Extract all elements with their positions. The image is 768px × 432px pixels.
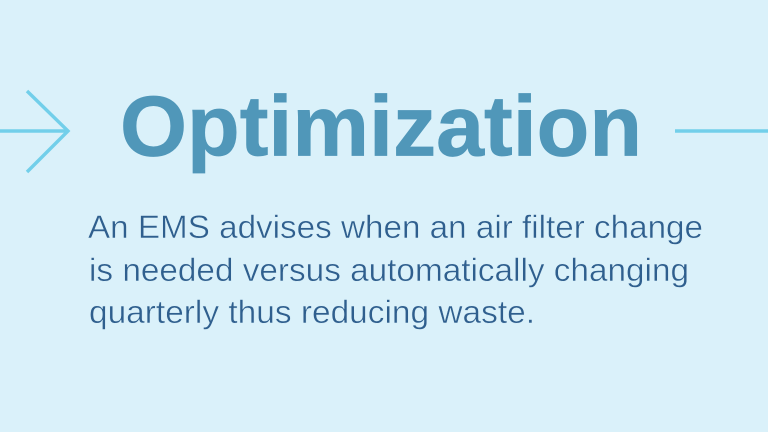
- arrow: right connector line: [675, 129, 768, 133]
- body line 3: quarterly thus reducing waste.: [89, 294, 535, 330]
- title: Optimization: [120, 80, 642, 174]
- body line 1: An EMS advises when an air filter change: [88, 209, 703, 245]
- body text: [88, 209, 703, 330]
- icon: left arrow: [0, 91, 68, 172]
- body line 2: is needed versus automatically changing: [89, 252, 689, 288]
